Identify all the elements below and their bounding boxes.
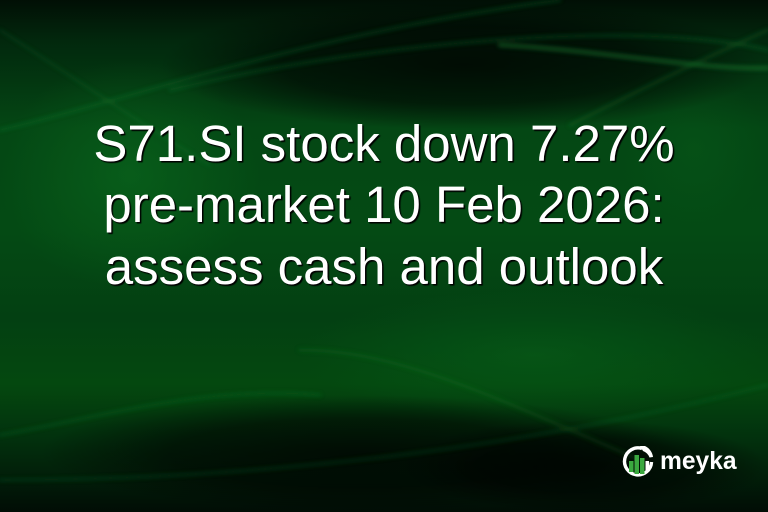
title — [93, 114, 675, 294]
title: pre-market 10 Feb 2026: — [103, 176, 665, 233]
wordmark: meyka — [660, 448, 737, 475]
icon: ring with green bars — [625, 446, 653, 475]
title: S71.SI stock down 7.27% — [93, 114, 675, 172]
logo: meyka — [622, 446, 737, 477]
title: assess cash and outlook — [105, 238, 663, 294]
